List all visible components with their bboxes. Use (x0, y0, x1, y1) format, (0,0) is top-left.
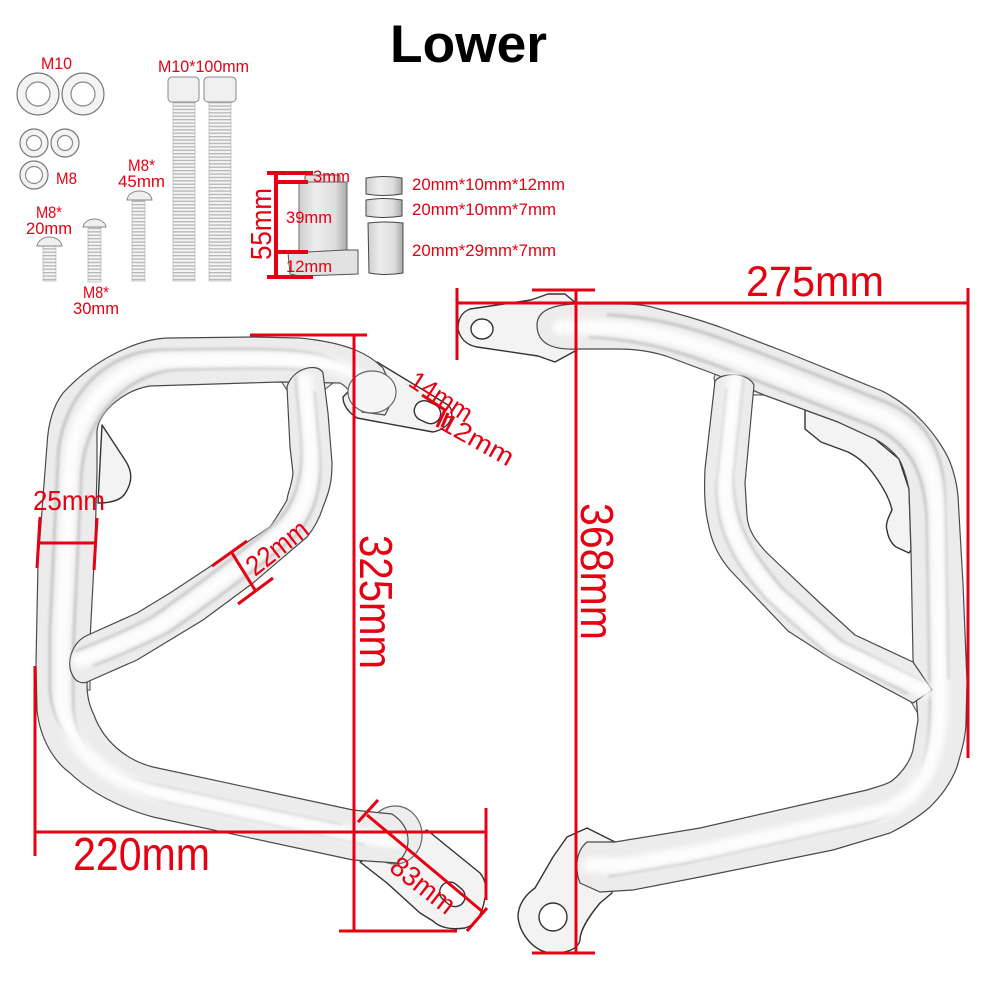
icon: bushing 7mm (366, 198, 402, 218)
label: M10*100mm: M10*100mm (158, 57, 249, 76)
dimension: 14mm slot: 14mm (404, 365, 479, 428)
label: M8*45mm (118, 156, 165, 191)
icon: M8x20 bolt (37, 237, 62, 281)
label: 20mm*10mm*7mm: 20mm*10mm*7mm (412, 200, 556, 219)
icon: bushing 12mm (366, 176, 402, 196)
tube shading (50, 349, 395, 844)
label: M8*45mm: 45mm (118, 172, 165, 191)
top plate weld (348, 371, 396, 413)
dimension: 83mm plate (358, 800, 487, 931)
dimension: 22mm strut (212, 514, 315, 604)
dimension: 325mm height (250, 335, 457, 931)
dimension: 25mm tube (33, 485, 105, 570)
dimension: 25mm tube: 25mm (33, 485, 105, 516)
title: Lower (390, 15, 547, 74)
dimension: 55mm bracket (246, 173, 313, 277)
side bracket (98, 425, 131, 503)
dimension: 275mm width: 275mm (746, 258, 884, 306)
dimension: 220mm width (35, 666, 487, 900)
icon: M10 washers (17, 73, 104, 115)
label: 20mm*29mm*7mm: 20mm*29mm*7mm (412, 241, 556, 260)
dimension: 275mm width (457, 258, 968, 758)
dimension: 368mm height: 368mm (571, 503, 623, 640)
top mounting plate (343, 362, 452, 432)
dimension: 83mm plate: 83mm (384, 850, 462, 920)
dimension: 22mm strut: 22mm (240, 514, 315, 582)
icon: M8 washers (20, 129, 79, 189)
dimension: 325mm height: 325mm (350, 535, 402, 669)
hardware kit: washers and bolts (17, 54, 249, 318)
label: M8*20mm (26, 203, 72, 238)
bottom mounting plate (360, 830, 486, 929)
label: M8: M8 (56, 169, 77, 188)
top mounting plate (458, 294, 577, 362)
label: M8*30mm: M8* (83, 283, 109, 302)
icon: M8x30 bolt (83, 219, 106, 282)
inner bracket (805, 410, 911, 553)
label: M10: M10 (41, 54, 72, 73)
label: M8*45mm: M8* (128, 156, 155, 175)
icon: bushing 29mm (368, 222, 403, 274)
main tube (537, 304, 967, 892)
left crash bar (36, 337, 486, 929)
strut shading (76, 378, 320, 665)
dimension: 12mm slot: 12mm (435, 407, 520, 472)
label: M8*30mm (73, 283, 119, 318)
label: M8*20mm: 20mm (26, 219, 72, 238)
welds (62, 358, 422, 864)
icon: M10x100 bolts (168, 77, 236, 281)
label: 3mm: 3mm (313, 167, 350, 186)
label: 12mm: 12mm (286, 257, 332, 276)
tube shading (560, 315, 948, 876)
dimension: 368mm height (532, 290, 623, 953)
main tube (36, 337, 408, 863)
strut shading (717, 379, 925, 693)
label: M8*30mm: 30mm (73, 299, 119, 318)
spacer with dimensions (246, 167, 565, 277)
icon: M8x45 bolt (127, 191, 152, 281)
label: 20mm*10mm*12mm: 20mm*10mm*12mm (412, 175, 565, 194)
welds (714, 363, 946, 712)
icon: stepped spacer (288, 175, 358, 276)
label: M8*20mm: M8* (36, 203, 62, 222)
inner strut tube (70, 368, 332, 683)
dimension: 55mm bracket: 55mm (246, 188, 278, 260)
right crash bar (458, 294, 967, 953)
label: 39mm: 39mm (286, 208, 332, 227)
inner strut tube (705, 375, 932, 703)
dimension: 220mm width: 220mm (73, 828, 210, 880)
bottom mounting plate (518, 828, 615, 953)
